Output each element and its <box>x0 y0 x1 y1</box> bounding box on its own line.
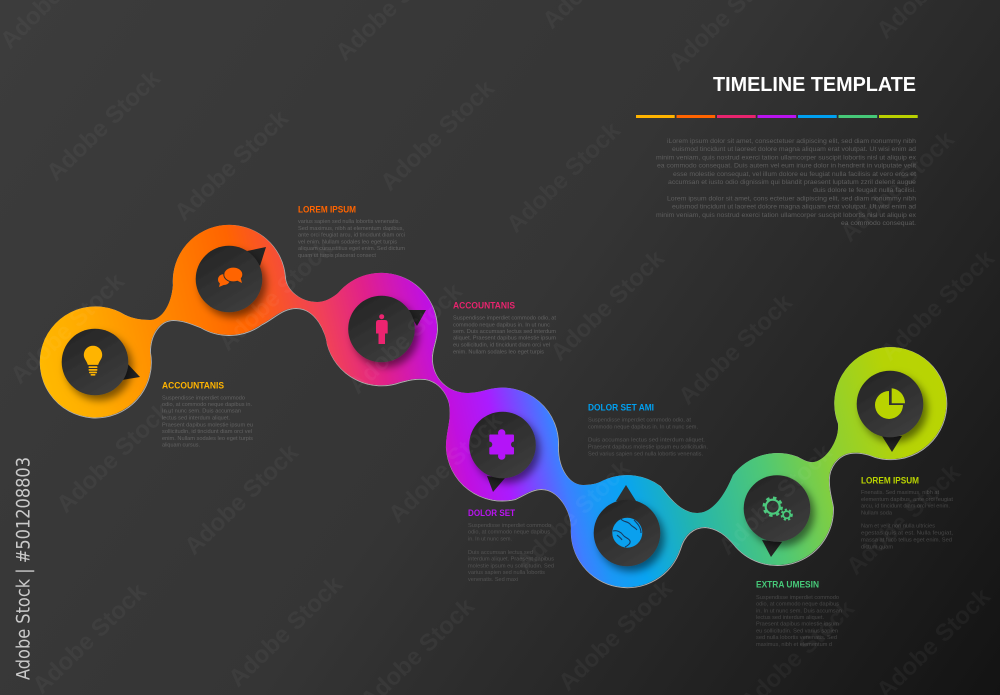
body text <box>861 490 953 550</box>
heading: DOLOR SET AMI <box>588 402 654 414</box>
watermarks: Adobe Stock <box>841 459 966 580</box>
body text: Fnenatis. Sed maximus, nibh at <box>861 490 939 496</box>
body text: ante orci feugiat arcu, id tincidunt diam orci <box>298 233 405 239</box>
disc 2 <box>196 246 262 312</box>
body text: vel enim. Nullam sodales leo eget turpis <box>298 239 397 245</box>
section: accountanis yellow <box>162 380 253 449</box>
body text: aliquet. Praesent dapibus molestie ipsum <box>453 336 556 342</box>
icon: puzzle piece <box>486 429 517 460</box>
icon: pie chart <box>875 388 905 419</box>
watermarks: Adobe Stock <box>713 439 838 560</box>
watermarks: Adobe Stock <box>213 235 338 356</box>
body text: massa at fuco tellus eget enim. Sed <box>861 537 952 543</box>
body text: lectus sed interdum aliquet. <box>162 415 230 421</box>
watermarks: Adobe Stock <box>501 117 626 238</box>
pointer 4 <box>487 476 505 492</box>
body text: Suspendisse imperdiet commodo <box>756 595 839 601</box>
body text <box>453 316 556 355</box>
disc 5 <box>594 500 660 566</box>
intro paragraph: minim veniam, quis nostrud exerci tation ullamcorper suscipit lobortis nisl ut aliquip ex <box>656 154 917 161</box>
watermarks: Adobe Stock <box>223 571 348 692</box>
body text: Suspendisse imperdiet commodo odio, at <box>453 316 556 322</box>
heading: ACCOUNTANIS <box>453 300 515 312</box>
body text: interdum aliquet. Praesent dapibus <box>468 557 554 563</box>
body text: commodo neque dapibus in. In ut nunc sem. <box>588 425 698 431</box>
disc 3 <box>348 296 415 362</box>
disc 7 <box>857 371 923 437</box>
body text <box>756 595 842 648</box>
intro paragraph: esse molestie consequat, vel illum dolore eu feugiat nulla facilisis at vero eros et <box>673 171 916 178</box>
milestone 1: bulb <box>62 329 140 395</box>
pointer 5 <box>616 485 636 501</box>
body text: Sed varius sapien sed nulla lobortis venenatis. <box>588 451 703 457</box>
body text: Suspendisse imperdiet commodo odio, at <box>588 417 691 423</box>
milestone 4: puzzle <box>469 412 536 492</box>
intro paragraph: euismod tincidunt ut laoreet dolore magna aliquam erat volutpat. Ut wisi enim ad <box>672 146 916 153</box>
watermarks: Adobe Stock <box>169 105 294 226</box>
watermarks: Adobe Stock <box>41 65 166 186</box>
watermarks: Adobe Stock <box>511 455 636 576</box>
body text: Praesent dapibus molestie ipsum eu sollicitudin. <box>588 444 708 450</box>
body text: Suspendisse imperdiet commodo <box>162 395 245 401</box>
intro paragraph: iLorem ipsum dolor sit amet, consectetuer adipiscing elit, sed diam nonummy nibh <box>667 138 916 145</box>
colour bar legend <box>636 115 918 118</box>
pointer 2 <box>247 247 266 266</box>
body text: eu sollicitudin. Sed varius sapien <box>756 628 838 634</box>
heading: LOREM IPSUM <box>861 476 919 486</box>
body text: Sed maximus, nibh at elementum dapibus, <box>298 226 404 232</box>
body text: varius sapien sed nulla lobortis <box>468 570 545 576</box>
body text <box>298 219 405 259</box>
body text: in. In ut nunc sem. Duis accumsan <box>756 608 842 614</box>
section: accountanis pink <box>453 300 556 355</box>
watermarks: Adobe Stock <box>875 245 1000 366</box>
icon: speech bubbles <box>218 267 243 287</box>
milestone 7: pie chart <box>857 371 923 452</box>
body text <box>162 395 253 449</box>
intro paragraph: euismod tincidunt ut laoreet dolore magna aliquam erat volutpat. Ut wisi enim ad <box>672 204 916 211</box>
pointer 7 <box>882 436 902 452</box>
body text: enim. Nullam sodales leo eget turpis <box>162 436 253 442</box>
icon: person <box>376 314 388 344</box>
body text: quam ut turpis placerat consect <box>298 253 376 259</box>
body text: lectus sed interdum aliquet. <box>756 615 824 621</box>
body text: aliquam cursustitius eget enim. Sed dictum <box>298 246 405 252</box>
body text: dictum quam <box>861 544 893 550</box>
heading: DOLOR SET <box>468 508 515 519</box>
body text: odio, at commodo neque dapibus <box>468 530 550 536</box>
watermarks: Adobe Stock <box>673 289 798 410</box>
heading: EXTRA UMESIN <box>756 580 819 590</box>
intro paragraph: accumsan et iusto odio dignissim qui blandit praesent luptatum zzril delenit augue <box>668 179 916 186</box>
section: dolor set purple <box>468 508 554 583</box>
pointer 1 <box>122 362 140 380</box>
watermarks: Adobe Stock <box>51 397 176 518</box>
body text: eu sollicitudin, id tincidunt diam orci vel <box>453 343 550 349</box>
body text: egestas quis at est. Nulla feugiat, <box>861 531 953 537</box>
body text: sed nulla lobortis venenatis. Sed <box>756 635 837 641</box>
body text <box>468 523 554 583</box>
milestone 3: person <box>348 296 426 362</box>
body text: varius sapien sed nulla lobortis venenatis. <box>298 219 400 225</box>
intro paragraph <box>656 138 917 227</box>
body text <box>588 417 708 457</box>
body text: maximus, nibh et elementum d <box>756 642 832 648</box>
body text: in. In ut nunc sem. <box>468 537 512 543</box>
watermarks: Adobe Stock <box>553 575 678 695</box>
body text: venenatis. Sed maxi <box>468 577 518 583</box>
body text: odio, at commodo neque dapibus in. <box>162 402 252 408</box>
disc 4 <box>469 412 536 478</box>
body text: aliquam cursus. <box>162 443 200 449</box>
body text: Nam et velit non nulla ultricies <box>861 524 935 530</box>
body text: In ut nunc sem. Duis accumsan <box>162 409 241 415</box>
body text: Praesent dapibus molestie ipsum eu <box>162 422 253 428</box>
milestone 6: gears <box>744 475 810 557</box>
intro paragraph: ea commodo consequat. <box>841 220 916 227</box>
icon: light bulb <box>84 346 102 376</box>
icon: globe <box>612 518 642 548</box>
heading: LOREM IPSUM <box>298 204 356 216</box>
watermarks: Adobe Stock <box>375 75 500 196</box>
intro paragraph: minim veniam, quis nostrud exerci tation ullamcorper suscipit lobortis nisl ut aliquip ex <box>656 212 917 219</box>
body text: Praesent dapibus molestie ipsum <box>756 622 839 628</box>
body text: commodo neque dapibus in. In ut nunc <box>453 322 550 328</box>
section: dolor set ami blue <box>588 402 708 457</box>
section: lorem ipsum orange <box>298 204 405 259</box>
body text: Suspendisse imperdiet commodo <box>468 523 551 529</box>
icon: gears <box>764 498 792 520</box>
body text: molestie ipsum eu sollicitudin. Sed <box>468 563 554 569</box>
body text: sollicitudin, id tincidunt diam orci vel <box>162 429 252 435</box>
watermarks: Adobe Stock <box>343 278 468 399</box>
intro paragraph: Lorem ipsum dolor sit amet, cons ectetuer adipiscing elit, sed diam nonummy nibh <box>667 195 916 202</box>
section: lorem ipsum lime <box>861 476 953 550</box>
body text: odio, at commodo neque dapibus <box>756 602 839 608</box>
disc 1 <box>62 329 128 395</box>
watermarks: Adobe Stock <box>835 126 960 247</box>
heading: ACCOUNTANIS <box>162 380 224 392</box>
body text: sem. Duis accumsan lectus sed interdum <box>453 329 556 335</box>
body text: elementum dapibus, ante orci feugiat <box>861 497 953 503</box>
section: extra umesin green <box>756 580 842 648</box>
watermarks: Adobe Stock <box>5 268 130 389</box>
watermarks: Adobe Stock <box>545 245 670 366</box>
body text: enim. Nullam sodales leo eget turpis <box>453 349 544 355</box>
watermarks: Adobe Stock <box>179 439 304 560</box>
intro paragraph: duis dolore te feugait nulla facilisi. <box>813 187 916 194</box>
pointer 6 <box>762 540 782 557</box>
watermarks: Adobe Stock <box>383 407 508 528</box>
body text: arcu, id tincidunt diam orci vel enim. <box>861 504 950 510</box>
intro paragraph: ea commodo consequat. Duis autem vel eum iriure dolor in hendrerit in vulputate velit <box>657 162 916 170</box>
body text: Duis accumsan lectus sed <box>468 550 533 556</box>
milestone 5: globe <box>594 485 660 566</box>
milestone 2: chat <box>196 246 266 312</box>
pointer 3 <box>407 310 426 326</box>
body text: Nullam soda <box>861 510 893 516</box>
stock id caption: Adobe Stock | #501208803 <box>12 457 34 680</box>
timeline ribbon <box>40 225 947 588</box>
title: TIMELINE TEMPLATE <box>713 73 916 96</box>
disc 6 <box>744 475 810 542</box>
body text: Duis accumsan lectus sed interdum aliquet. <box>588 438 705 444</box>
